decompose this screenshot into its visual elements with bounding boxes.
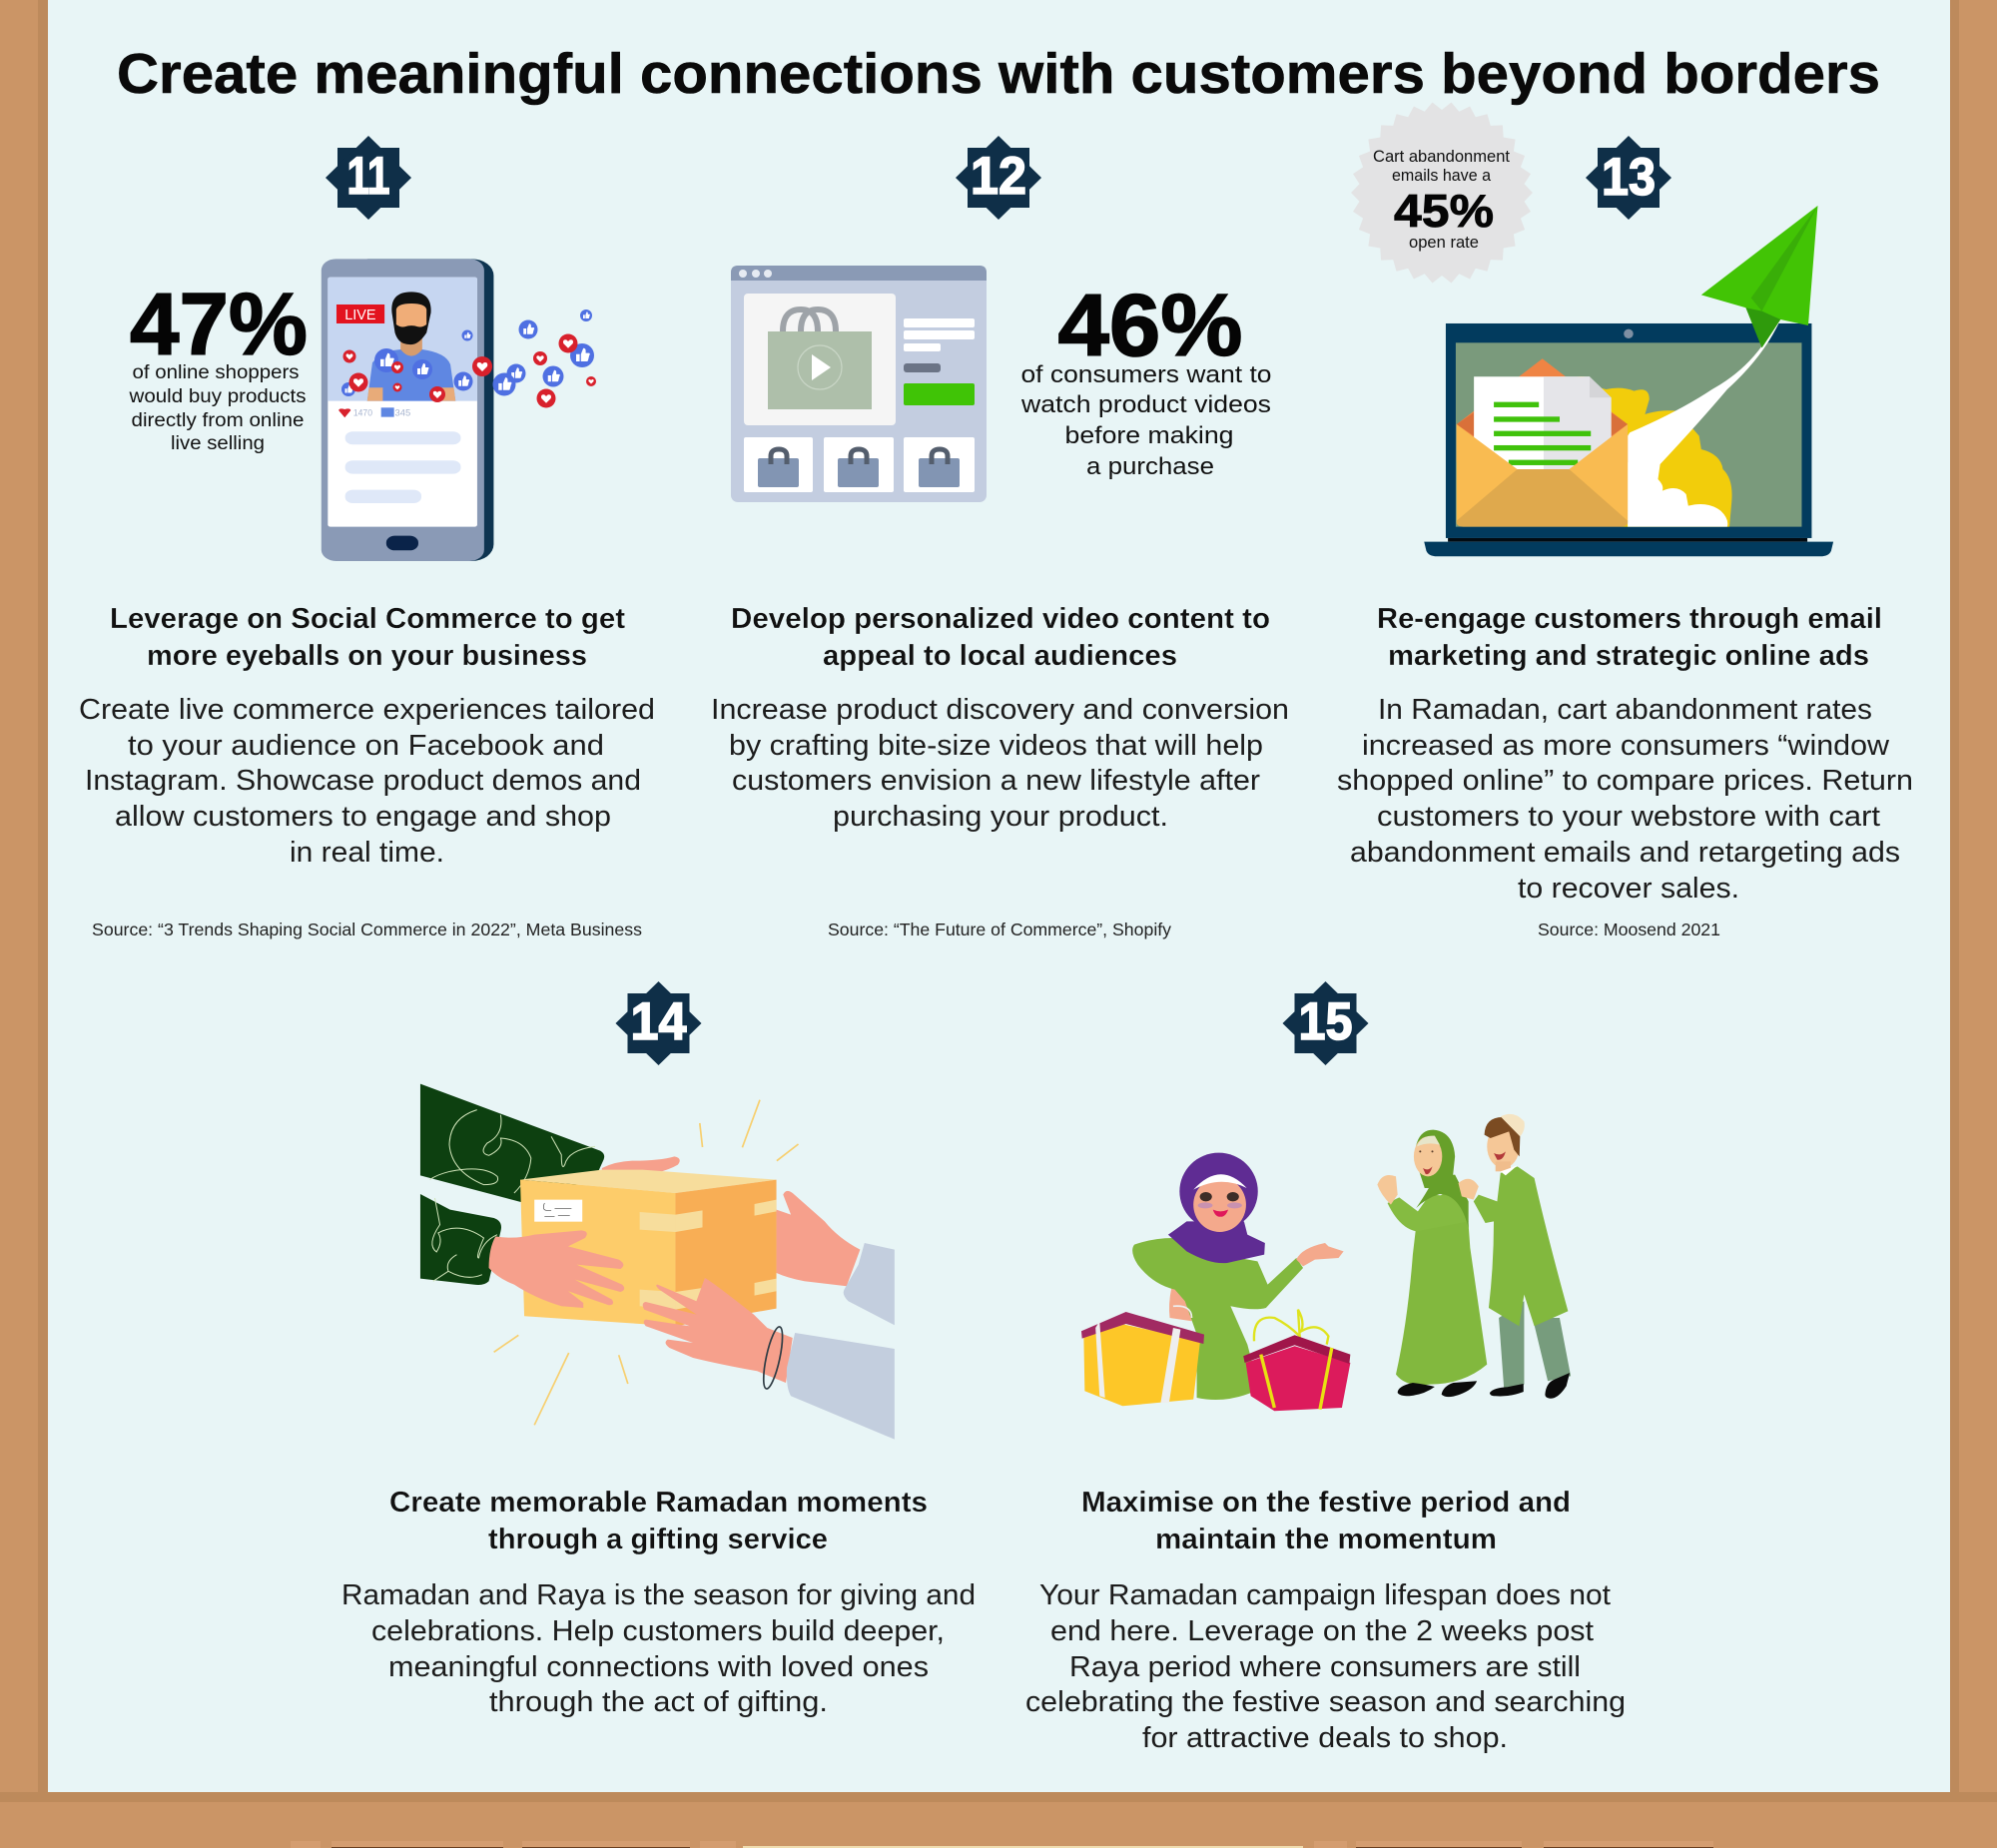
body text 12: by crafting bite-size videos that will help [729,730,1263,762]
stat 47%: of online shoppers [132,361,300,383]
icon: smartphone live selling: 1470 [353,408,372,418]
callout: cart abandonment starburst: emails have a [1392,167,1492,185]
body text 11: Instagram. Showcase product demos and [85,765,641,797]
heading 11: more eyeballs on your business [147,640,587,672]
body text 14: celebrations. Help customers build deeper, [371,1615,945,1647]
body text 12: purchasing your product. [833,801,1168,833]
body text 13: shopped online” to compare prices. Return [1337,765,1913,797]
badge 12 [956,136,1041,220]
illustration: product video web page [731,266,987,502]
panel: tip 12 video content [711,136,1289,939]
body text 15: Your Ramadan campaign lifespan does not [1039,1579,1611,1611]
body text 12: customers envision a new lifestyle after [732,765,1260,797]
heading 13: marketing and strategic online ads [1388,640,1869,672]
callout: cart abandonment starburst [1351,102,1533,284]
callout: cart abandonment starburst: open rate [1409,234,1479,252]
body text 11 [79,694,655,869]
source 11: Source: “3 Trends Shaping Social Commerce in 2022”, Meta Business [92,920,642,939]
panel: tip 13 email marketing [1337,102,1913,939]
heading 12: Develop personalized video content to [731,603,1270,635]
heading 14: through a gifting service [488,1524,828,1555]
heading 12 [731,603,1270,672]
source 12: Source: “The Future of Commerce”, Shopify [828,920,1171,939]
heading 14 [389,1487,928,1555]
body text 13: increased as more consumers “window [1362,730,1890,762]
heading 15: maintain the momentum [1155,1524,1497,1555]
body text 13: abandonment emails and retargeting ads [1350,837,1900,869]
body text 15: end here. Leverage on the 2 weeks post [1050,1615,1594,1647]
illustration: woman with gifts and greeting couple [1081,1114,1571,1411]
body text 14: meaningful connections with loved ones [388,1651,929,1683]
stat 46%: before making [1064,422,1234,449]
body text 15: Raya period where consumers are still [1069,1651,1581,1683]
badge 15: 15 [1298,992,1352,1051]
source 13: Source: Moosend 2021 [1538,920,1720,939]
badge 12: 12 [971,147,1026,206]
panel: tip 15 festive period [1025,981,1626,1754]
heading 15 [1081,1487,1571,1555]
panel: tip 11 social commerce [79,136,655,939]
body text 11: allow customers to engage and shop [115,801,611,833]
stat 46% [1020,276,1272,480]
body text 14: Ramadan and Raya is the season for giving and [341,1579,976,1611]
body text 12 [711,694,1289,833]
body text 12: Increase product discovery and conversion [711,694,1289,726]
badge 15 [1282,981,1368,1065]
illustration: hands passing parcel [420,1084,895,1440]
illustration: laptop with email and paper plane [1424,206,1833,556]
stat 47% [128,275,308,454]
body text 13 [1337,694,1913,905]
badge 13 [1586,136,1671,220]
stat 47%: would buy products [128,385,307,407]
body text 13: customers to your webstore with cart [1377,801,1880,833]
body text 14: through the act of gifting. [489,1686,828,1718]
body text 14 [341,1579,976,1718]
body text 13: In Ramadan, cart abandonment rates [1378,694,1872,726]
heading 11: Leverage on Social Commerce to get [110,603,625,635]
heading 11 [110,603,625,672]
heading 15: Maximise on the festive period and [1081,1487,1571,1519]
heading 14: Create memorable Ramadan moments [389,1487,928,1519]
stat 47%: live selling [171,432,265,454]
stat 46%: a purchase [1086,453,1214,480]
heading 12: appeal to local audiences [823,640,1177,672]
icon: smartphone live selling: LIVE [344,307,375,322]
stat 46%: 46% [1058,276,1242,374]
body text 15 [1025,1579,1626,1754]
body text 15: celebrating the festive season and searching [1025,1686,1626,1718]
callout: cart abandonment starburst: Cart abandonment [1373,148,1510,166]
stat 46%: watch product videos [1020,391,1271,418]
body text 13: to recover sales. [1518,873,1739,905]
panel: tip 14 gifting [341,981,976,1718]
stat 47%: directly from online [132,409,304,431]
title: Create meaningful connections with customers beyond borders [117,42,1880,106]
body text 11: to your audience on Facebook and [128,730,604,762]
badge 11: 11 [347,147,389,206]
heading 13: Re-engage customers through email [1377,603,1882,635]
callout: cart abandonment starburst: 45% [1394,185,1494,237]
badge 13: 13 [1602,148,1656,207]
body text 11: Create live commerce experiences tailored [79,694,655,726]
stat 47%: 47% [130,275,308,373]
icon: smartphone live selling [322,259,596,561]
heading 13 [1377,603,1882,672]
body text 11: in real time. [290,837,444,869]
badge 14 [615,981,701,1065]
badge 11 [326,136,411,220]
stat 46%: of consumers want to [1020,361,1272,388]
badge 14: 14 [631,992,687,1051]
icon: smartphone live selling: 345 [395,408,410,418]
body text 15: for attractive deals to shop. [1142,1722,1508,1754]
